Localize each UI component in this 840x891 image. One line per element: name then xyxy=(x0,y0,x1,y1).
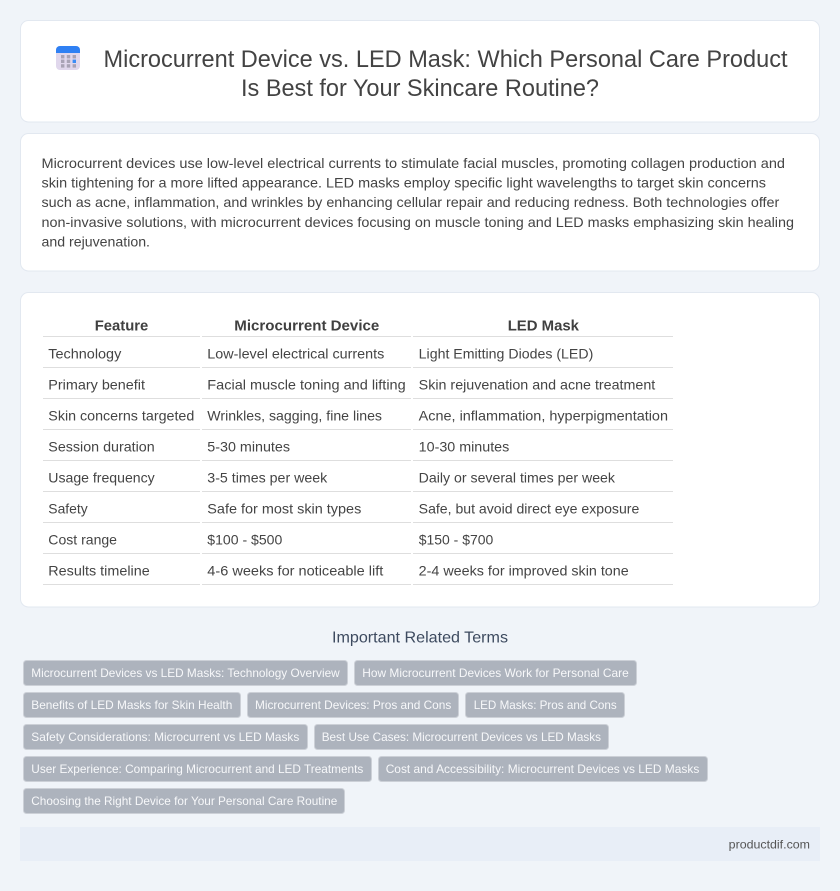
row: safety: Safety xyxy=(48,500,88,516)
row: skin concerns: Skin concerns targeted xyxy=(48,407,194,423)
tag: safety considerations xyxy=(24,724,308,750)
row: results timeline: 4-6 weeks for noticeable lift xyxy=(207,562,383,578)
tag: how devices work: How Microcurrent Devices Work for Personal Care xyxy=(362,666,629,680)
tag: LED pros and cons: LED Masks: Pros and Cons xyxy=(474,698,617,712)
tag: cost and accessibility: Cost and Accessibility: Microcurrent Devices vs LED Masks xyxy=(386,762,699,776)
row: safety: Safe, but avoid direct eye exposure xyxy=(419,500,640,516)
table header row: LED Mask xyxy=(508,318,580,335)
tag: technology overview: Microcurrent Devices vs LED Masks: Technology Overview xyxy=(31,666,340,680)
tag: technology overview xyxy=(24,660,348,686)
text block: introduction xyxy=(42,155,794,249)
related term tags xyxy=(24,660,708,814)
row: primary benefit: Facial muscle toning and lifting xyxy=(207,376,406,392)
footer bar: productdif.com xyxy=(729,837,810,851)
panel: introduction xyxy=(20,134,820,271)
row: primary benefit: Skin rejuvenation and acne treatment xyxy=(419,376,655,392)
row: technology: Light Emitting Diodes (LED) xyxy=(419,345,593,361)
row: technology: Low-level electrical currents xyxy=(207,345,384,361)
tag: microcurrent pros and cons xyxy=(248,692,458,718)
row: primary benefit xyxy=(48,376,655,392)
icon: calendar xyxy=(56,46,80,70)
panel: header xyxy=(20,20,820,122)
row: session duration: Session duration xyxy=(48,438,155,454)
row: usage frequency: Daily or several times per week xyxy=(419,469,616,485)
heading: related terms: Important Related Terms xyxy=(332,630,508,647)
row: skin concerns xyxy=(48,407,668,423)
row: session duration: 5-30 minutes xyxy=(207,438,290,454)
row: technology: Technology xyxy=(48,345,121,361)
footer bar xyxy=(20,827,820,861)
text block: introduction: Microcurrent devices use low-level electrical currents to stimulate facial muscles, promoting collagen production and xyxy=(42,155,785,171)
row: skin concerns: Wrinkles, sagging, fine lines xyxy=(207,407,382,423)
tag: choosing the right device: Choosing the Right Device for Your Personal Care Routine xyxy=(31,794,338,808)
row: safety: Safe for most skin types xyxy=(207,500,361,516)
text block: introduction: and rejuvenation. xyxy=(42,233,150,249)
table header row: Microcurrent Device xyxy=(234,318,379,335)
tag: best use cases xyxy=(314,724,608,750)
row: usage frequency xyxy=(48,469,616,485)
row: cost range xyxy=(48,531,494,547)
row: safety xyxy=(48,500,640,516)
tag: best use cases: Best Use Cases: Microcurrent Devices vs LED Masks xyxy=(322,730,601,744)
tag: cost and accessibility xyxy=(378,756,708,782)
table header row xyxy=(95,318,580,335)
panel: comparison table xyxy=(20,292,820,607)
text block: introduction: skin tightening for a more lifted appearance. LED masks employ specific light wavelengths to target skin concerns xyxy=(42,175,766,191)
tag: LED pros and cons xyxy=(466,692,624,718)
title xyxy=(104,46,788,102)
title: Microcurrent Device vs. LED Mask: Which Personal Care Product xyxy=(104,46,788,73)
tag: benefits of LED masks xyxy=(24,692,240,718)
row: results timeline xyxy=(48,562,629,578)
row: primary benefit: Primary benefit xyxy=(48,376,145,392)
title: Is Best for Your Skincare Routine? xyxy=(241,75,599,102)
tag: benefits of LED masks: Benefits of LED Masks for Skin Health xyxy=(31,698,232,712)
tag: how devices work xyxy=(354,660,636,686)
tag: safety considerations: Safety Considerations: Microcurrent vs LED Masks xyxy=(31,730,299,744)
row: usage frequency: Usage frequency xyxy=(48,469,155,485)
row: session duration: 10-30 minutes xyxy=(419,438,509,454)
row: cost range: $150 - $700 xyxy=(419,531,494,547)
tag: user experience: User Experience: Comparing Microcurrent and LED Treatments xyxy=(31,762,363,776)
tag: choosing the right device xyxy=(24,788,344,814)
row: technology xyxy=(48,345,593,361)
row: results timeline: Results timeline xyxy=(48,562,150,578)
row: results timeline: 2-4 weeks for improved skin tone xyxy=(419,562,629,578)
table header row: Feature xyxy=(95,318,148,335)
row: cost range: $100 - $500 xyxy=(207,531,283,547)
tag: user experience xyxy=(24,756,372,782)
row: usage frequency: 3-5 times per week xyxy=(207,469,328,485)
row: skin concerns: Acne, inflammation, hyperpigmentation xyxy=(419,407,668,423)
text block: introduction: such as acne, inflammation, and wrinkles by enhancing cellular repair and reducing redness. Both technologies offer xyxy=(42,194,780,210)
tag: microcurrent pros and cons: Microcurrent Devices: Pros and Cons xyxy=(255,698,451,712)
text block: introduction: non-invasive solutions, with microcurrent devices focusing on muscle toning and LED masks emphasizing skin healing xyxy=(42,214,794,230)
row: session duration xyxy=(48,438,509,454)
row: cost range: Cost range xyxy=(48,531,117,547)
